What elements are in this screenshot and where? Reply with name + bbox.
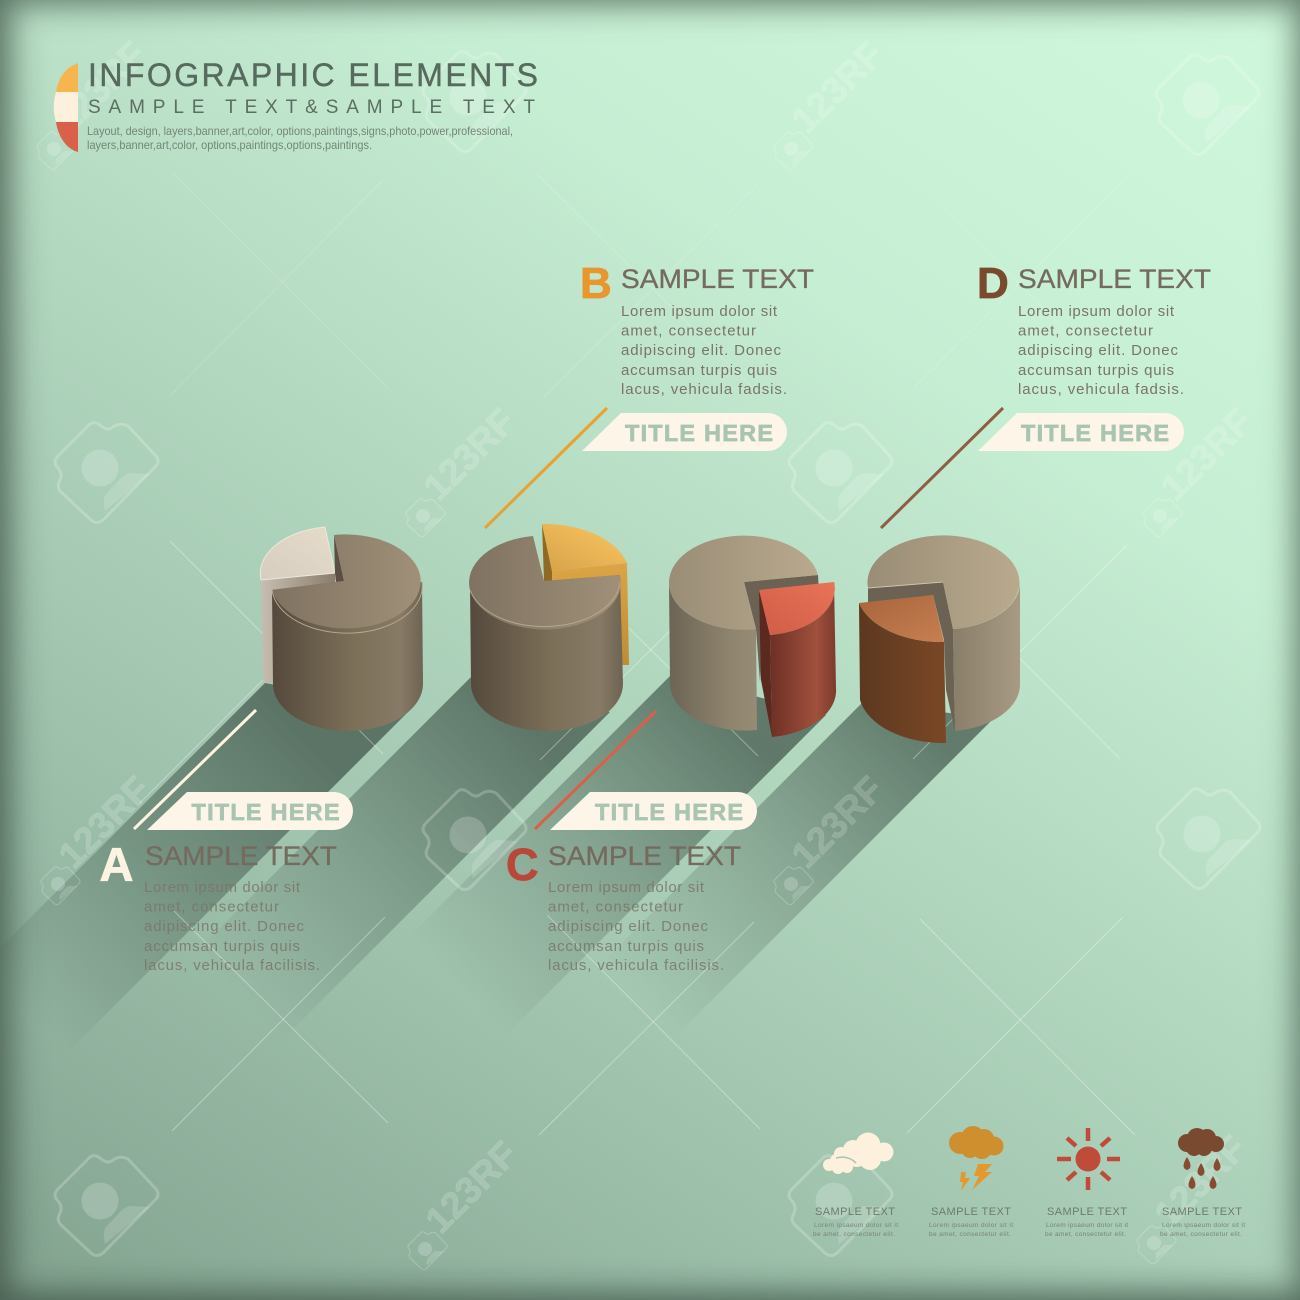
weather item 3	[1045, 1128, 1128, 1238]
description 1: be amet, consectetur elit.	[813, 1231, 895, 1238]
title pill C	[550, 792, 757, 830]
connector line B	[485, 408, 607, 528]
callout B	[485, 259, 814, 528]
body A: accumsan turpis quis	[144, 938, 300, 955]
header	[54, 57, 538, 152]
weather item 1	[813, 1132, 898, 1238]
title pill B	[582, 413, 787, 451]
description 2: Lorem ipsaeum dolor sit it	[929, 1222, 1013, 1229]
watermarks: 123RF	[51, 769, 158, 876]
callout A	[100, 710, 353, 974]
pie chart B: yellow slice	[469, 524, 629, 731]
header description: layers,banner,art,color, options,paintings,options,paintings.	[87, 138, 372, 152]
heading D: SAMPLE TEXT	[1018, 264, 1211, 294]
description 2: be amet, consectetur elit.	[929, 1231, 1011, 1238]
watermarks: 123RF	[418, 1134, 525, 1241]
weather item 2	[929, 1126, 1013, 1238]
body D: Lorem ipsum dolor sit	[1018, 303, 1175, 320]
caption 1: SAMPLE TEXT	[815, 1206, 895, 1218]
icon: storm cloud	[949, 1126, 1004, 1191]
description 4: Lorem ipsaeum dolor sit it	[1162, 1222, 1245, 1229]
body D: adipiscing elit. Donec	[1018, 342, 1178, 359]
connector line A	[134, 710, 256, 829]
caption 4: SAMPLE TEXT	[1162, 1206, 1242, 1218]
thin diagonal cross lines, middle and bottom rows	[140, 541, 1135, 1135]
body A: Lorem ipsum dolor sit	[144, 879, 301, 896]
title pill A: TITLE HERE	[192, 799, 340, 825]
connector line D	[881, 408, 1003, 528]
description 3: Lorem ipsaeum dolor sit it	[1046, 1222, 1128, 1229]
title pill C: TITLE HERE	[595, 799, 743, 825]
body D: amet, consectetur	[1018, 322, 1153, 340]
watermarks: 123RF	[784, 34, 891, 141]
connector line C	[535, 711, 656, 829]
body A: adipiscing elit. Donec	[144, 918, 304, 935]
body B: amet, consectetur	[621, 322, 756, 340]
body B: Lorem ipsum dolor sit	[621, 303, 778, 320]
weather item 4	[1160, 1128, 1245, 1238]
title pill A	[147, 792, 353, 830]
body C: Lorem ipsum dolor sit	[548, 879, 705, 896]
description 1: Lorem ipsaeum dolor sit it	[814, 1222, 898, 1229]
icon: rain cloud	[1178, 1128, 1224, 1189]
callout D	[881, 259, 1211, 528]
description 4: be amet, consectetur elit.	[1160, 1231, 1242, 1238]
icon: sun	[1057, 1128, 1120, 1190]
caption 2: SAMPLE TEXT	[931, 1206, 1011, 1218]
long shadows	[0, 674, 994, 1131]
header colour bar	[54, 63, 78, 152]
body C: lacus, vehicula facilisis.	[548, 957, 724, 974]
body C: accumsan turpis quis	[548, 938, 704, 955]
title: INFOGRAPHIC ELEMENTS	[88, 57, 538, 93]
letter B: B	[580, 259, 612, 308]
title pill D	[978, 413, 1184, 451]
pie chart A: cream slice	[260, 527, 423, 731]
heading A: SAMPLE TEXT	[145, 841, 337, 871]
subtitle: SAMPLE TEXT&SAMPLE TEXT	[88, 97, 535, 118]
body B: adipiscing elit. Donec	[621, 342, 782, 359]
heading C: SAMPLE TEXT	[548, 841, 741, 871]
body B: lacus, vehicula fadsis.	[621, 381, 787, 398]
body C: amet, consectetur	[548, 898, 683, 916]
title pill D: TITLE HERE	[1021, 420, 1169, 446]
body A: amet, consectetur	[144, 898, 279, 916]
body C: adipiscing elit. Donec	[548, 918, 708, 935]
heading B: SAMPLE TEXT	[621, 264, 814, 294]
icon: cream clouds	[823, 1132, 894, 1174]
header description: Layout, design, layers,banner,art,color, options,paintings,signs,photo,power,professional,	[87, 124, 513, 138]
pie chart D: brown slice	[859, 535, 1020, 743]
callout C	[506, 711, 757, 974]
letter D: D	[977, 259, 1009, 308]
description 3: be amet, consectetur elit.	[1045, 1231, 1126, 1238]
title pill B: TITLE HERE	[625, 420, 773, 446]
watermarks: 123RF	[416, 401, 523, 508]
letter A: A	[100, 838, 133, 891]
watermarks: 123RF	[1147, 1128, 1254, 1235]
pie chart C: red slice	[669, 536, 836, 737]
caption 3: SAMPLE TEXT	[1047, 1206, 1127, 1218]
watermarks: 123RF	[47, 34, 154, 141]
letter C: C	[506, 839, 538, 890]
body D: lacus, vehicula fadsis.	[1018, 381, 1184, 398]
watermarks: 123RF	[784, 769, 891, 876]
watermarks: 123RF	[1153, 401, 1260, 508]
body B: accumsan turpis quis	[621, 362, 777, 379]
body D: accumsan turpis quis	[1018, 362, 1174, 379]
thin diagonal cross lines, top row	[170, 172, 1131, 398]
body A: lacus, vehicula facilisis.	[144, 957, 320, 974]
